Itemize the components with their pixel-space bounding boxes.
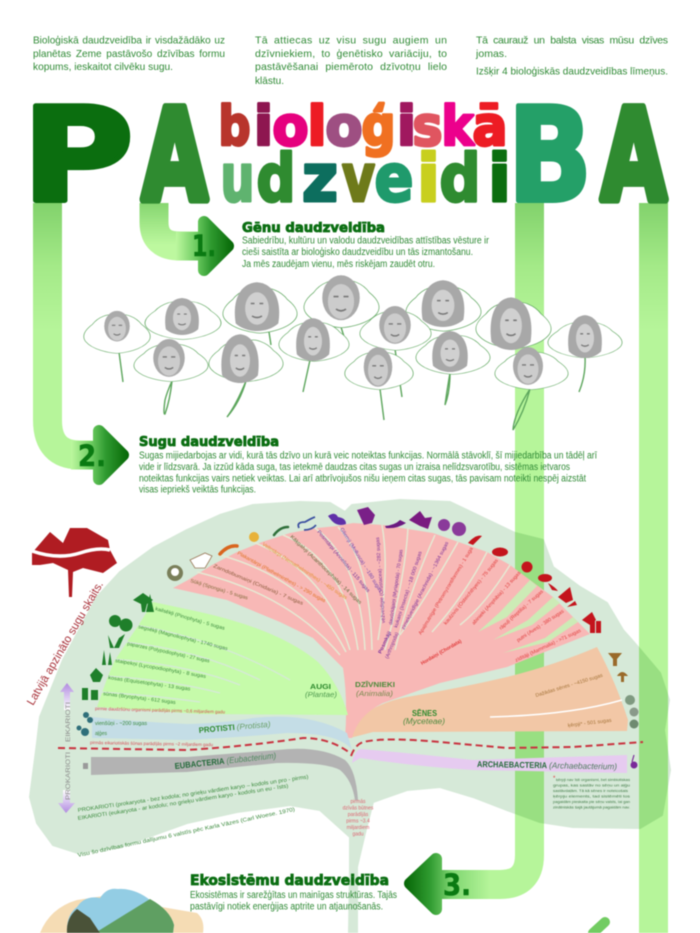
- plant labels: sūnas (Bryophyta) - 612 sugas: [103, 691, 176, 706]
- protist labels: aļģes: [95, 730, 108, 737]
- note: first life forms: dzīvās būtnes: [343, 806, 374, 812]
- arthropod labels: [375, 537, 451, 660]
- icon: Latvia map leaf: [32, 528, 117, 597]
- plant labels: kailsēkļi (Pinophyta) - 5 sugas: [154, 606, 226, 632]
- note: first eukaryotic cells: pirmās eikariotiskās šūnas parādījās pirms ~2 miljardiem gadu: [90, 740, 214, 747]
- title: bioloģiskā: [218, 95, 508, 158]
- text: ecosystem diversity: Ekosistēmas ir sarežģītas un mainīgas struktūras. Tajās: [190, 888, 397, 901]
- title: bioloģiskā: o: [272, 95, 308, 158]
- icons: fungi: [608, 653, 638, 728]
- title: udzveidi: i: [488, 140, 511, 217]
- title: udzveidi: [220, 140, 511, 217]
- label: PROTISTI: PROTISTI: [198, 723, 235, 735]
- note: lichens footnote: sastāvdaļām. Tā kā sēnes ir noteicošais: [553, 789, 628, 793]
- plant labels: segsēkļi (Magnoliophyta) - 1740 sugas: [138, 624, 229, 652]
- icons: vertebrates: [468, 536, 601, 633]
- ginkgo leaf with face 9: [209, 334, 283, 417]
- intro paragraph 2: klāstu.: [255, 75, 284, 87]
- label: AUGI (Plantae): (Plantae): [305, 690, 338, 699]
- fungi labels: Dažādas sēnes - ~4150 sugas: [535, 673, 604, 699]
- label: EUBACTERIA: [174, 750, 277, 771]
- text: genetic diversity: Ja mēs zaudējam vienu, mēs riskējam zaudēt otru.: [242, 259, 435, 270]
- invertebrate labels: Kāķgalvji (Acanthocephala) - 14 sugas: [289, 534, 363, 606]
- white line in fungi wedge: [490, 700, 622, 717]
- note: lichens footnote: grupas, kas sastāv no sēņu un aļģu: [553, 782, 630, 788]
- panel: fungi wedge: [350, 647, 628, 738]
- heading: Sugu daudzveidība: Sugu daudzveidība: [139, 435, 279, 450]
- arthropod labels: vēžveidīgie (Crustacea) - ~282 sugas: [375, 537, 387, 623]
- text: genetic diversity: cieši saistīta ar bioloģisko daudzveidību un tās izmantošanu.: [242, 245, 473, 258]
- note: first life forms: pirmās: [350, 799, 366, 805]
- invertebrate labels: Sūkļi (Spongia) - 5 sugas: [189, 578, 249, 602]
- title: udzveidi: v: [342, 140, 375, 217]
- intro paragraph 3: jomas.: [475, 48, 507, 60]
- arthropod labels: daudzkājaiņi (Myriapoda) - 70 sugas: [388, 549, 405, 625]
- intro paragraph 3: Izšķir 4 bioloģiskās daudzveidības līmeņus.: [476, 64, 668, 78]
- heading: Gēnu daudzveidība: Gēnu daudzveidība: [242, 221, 385, 236]
- intro paragraph 2: [255, 34, 447, 87]
- title: big letters PA: [22, 81, 207, 232]
- label: DZĪVNIEKI (Animalia): [355, 680, 395, 698]
- label: SĒNES (Myceteae): SĒNES: [412, 709, 438, 718]
- fungi labels: [535, 673, 612, 729]
- title: udzveidi: u: [220, 140, 254, 217]
- label: ARCHAEBACTERIA: [477, 759, 617, 771]
- chordate labels: Apaļmutnīgie (Petromyzontiformes) - 1 suga: [418, 546, 475, 636]
- note: first life forms: [343, 799, 374, 838]
- ginkgo leaf with face 7: [548, 315, 622, 392]
- arthropod labels: Posmkāji: [377, 630, 393, 655]
- ginkgo leaf with face 10: [279, 318, 349, 392]
- intro paragraph 1: [33, 34, 225, 73]
- title: udzveidi: z: [302, 140, 338, 217]
- text: species diversity: noteiktas funkcijas vairs netiek veiktas. Lai arī atbrīvojušos nišu ieņem citas sugas, tās pavisam noteikti nespēj aizstāt: [139, 474, 586, 484]
- plant labels: [103, 606, 229, 706]
- title: big letters BA: A: [601, 83, 666, 230]
- ginkgo leaf with face 4: [304, 275, 379, 340]
- text: ecosystem diversity: [190, 888, 397, 912]
- plant wedge dividers: [100, 625, 290, 702]
- title: udzveidi: d: [440, 140, 480, 217]
- chordate labels: zīdītāji (Mammalia) - >71 sugas: [514, 628, 583, 664]
- title: bioloģiskā: k: [442, 95, 474, 158]
- note: lichens footnote: zinātniskās šajā jautājumā pagaidām nav.: [553, 806, 630, 810]
- title: bioloģiskā: l: [308, 95, 326, 158]
- intro paragraph 1: kopums, ieskaitot cilvēku sugu.: [33, 61, 173, 73]
- note: lichens footnote: *: [553, 776, 556, 782]
- ginkgo leaf with face 13: [345, 347, 413, 420]
- arthropod labels: (Arthropoda): [384, 631, 400, 660]
- note: lichens footnote: [553, 776, 630, 810]
- band and arrow 1: 1.: [192, 229, 216, 263]
- text: species diversity: Sugas mijiedarbojas ar vidi, kurā tās dzīvo un kurā veic noteiktas funkcijas. Normālā stāvoklī, šī mijiedarbība un tādēļ arī: [139, 450, 597, 462]
- title: bioloģiskā: b: [218, 95, 250, 158]
- intro paragraph 1: planētas Zeme pastāvošo dzīvības formu: [33, 48, 225, 60]
- label: PROTISTI: (Protista): [236, 720, 271, 732]
- text: prokaryote and eukaryote definitions: PROKARIOTI (prokaryota - bez kodola; no grieķu vārdiem karyo – kodols un pro - pirms): [77, 774, 309, 814]
- title: udzveidi: i: [417, 140, 440, 217]
- invertebrate labels: Gliemji (Mollusca) - ~180 sugas: [338, 527, 383, 594]
- plant labels: paparzes (Polypodiophyta) - 27 sugas: [127, 641, 210, 665]
- title: big letters PA: P: [22, 81, 133, 232]
- text: genetic diversity: [242, 236, 490, 270]
- invertebrate labels: Posmtārpi (Annelida) - 115 sugas: [315, 529, 371, 594]
- icons: protists: [76, 712, 93, 736]
- animal wedge dividers: [197, 525, 578, 655]
- ginkgo leaf with face 2: [145, 298, 221, 340]
- title: bioloģiskā: i: [397, 95, 416, 158]
- label: DZĪVNIEKI (Animalia): (Animalia): [356, 689, 394, 698]
- label: PROTISTI: [198, 720, 271, 735]
- band and arrow 2: [48, 203, 123, 479]
- ginkgo leaf with face 6: [476, 297, 551, 350]
- intro paragraph 2: Tā attiecas uz visu sugu augiem un: [255, 34, 447, 46]
- label: SĒNES (Myceteae): (Myceteae): [403, 717, 445, 726]
- chordate labels: [418, 546, 583, 667]
- band: right green stem: [639, 203, 668, 933]
- title: bioloģiskā: s: [412, 95, 442, 158]
- label: AUGI (Plantae): AUGI: [310, 682, 331, 691]
- chordate labels: kaulzivis (Osteichthyes) - 75 sugas: [443, 558, 500, 626]
- band and arrow 3: [410, 203, 530, 909]
- ginkgo leaf with face 14: [495, 347, 568, 430]
- intro paragraph 3: [475, 34, 668, 78]
- fungi labels: ķērpji* - 501 sugas: [568, 718, 612, 729]
- note: first multicellular organisms: pirmie daudzšūnu organismi parādījās pirms ~0,6 miljardiem gadu: [95, 706, 226, 714]
- protist labels: vienšūņi - ~200 sugas: [95, 721, 148, 727]
- chordate labels: abinieki (Amphibia) - 13 sugas: [471, 570, 523, 626]
- panel: ginkgo fan background: [30, 500, 670, 933]
- panel: protists band: [92, 717, 352, 750]
- label: EUBACTERIA: (Eubacterium): [226, 750, 277, 766]
- text: species diversity: [139, 450, 597, 496]
- text: six kingdoms source: Visu šo dzīvības formu dalījumu 6 valstīs pēc Karla Vāzes (Carl Woese. 1970): [77, 807, 296, 859]
- invertebrate labels: Zarndobumaiņi (Cnidaria) - 7 sugas: [212, 563, 304, 607]
- note: lichens footnote: ķērpju elements, tad sistēmēti tos: [553, 794, 630, 798]
- title: bioloģiskā: ģ: [362, 95, 396, 158]
- ginkgo leaf with face 1: [84, 311, 150, 382]
- label: ARCHAEBACTERIA: ARCHAEBACTERIA: [477, 759, 547, 770]
- chordate labels: putni (Aves) - 380 sugas: [516, 608, 566, 644]
- invertebrate labels: [189, 527, 383, 607]
- label: ARCHAEBACTERIA: (Archaebacterium): [549, 760, 617, 771]
- ginkgo leaf with face 11: [360, 306, 431, 397]
- icons: bacteria: [83, 755, 638, 769]
- band and arrow 2: 2.: [78, 439, 106, 473]
- icons: plants: [82, 593, 154, 700]
- text: species diversity: vide ir līdzsvarā. Ja izzūd kāda suga, tas ietekmē daudzas citas sugas un izraisa nelīdzsvarotību, sistēmas ietvaros: [139, 462, 570, 473]
- invertebrate labels: Plakantārpi (Plathelminthes) - > 290 sugas: [236, 551, 327, 604]
- arthropod labels: zirnekļveidīgie (Arachnida) - ~1364 sugas: [400, 540, 451, 631]
- note: lichens footnote: ķērpji nav īsti organismi, bet simbiotiskas: [556, 778, 630, 782]
- ecosystem leaf: mountain scene: [67, 889, 174, 933]
- ecosystem leaf: beige base: [40, 895, 203, 933]
- plant labels: staipekņi (Lycopodiophyta) - 8 sugas: [115, 658, 207, 680]
- icons: invertebrates: [167, 507, 466, 581]
- invertebrate labels: Veltņtārpi (Nemathelminthes) - ~450 sugas: [261, 542, 348, 601]
- label: AUGI (Plantae): [305, 682, 338, 699]
- text: species diversity: visas iepriekš veiktās funkcijas.: [139, 484, 256, 496]
- label: SĒNES (Myceteae): [403, 709, 445, 726]
- text: prokaryote and eukaryote definitions: EIKARIOTI (eukaryota - ar kodolu; no grieķu vārdiem karyo - kodols un eu - īsts): [77, 783, 289, 822]
- panel: plants wedge: [97, 602, 348, 715]
- panel: eubacteria band: [91, 749, 358, 800]
- panel: archaebacteria band: [352, 749, 627, 773]
- intro paragraph 1: Bioloģiskā daudzveidība ir visdažādāko uz: [33, 34, 225, 46]
- title: big letters BA: B: [508, 81, 592, 232]
- dashed line: eukaryote / prokaryote boundary: [58, 738, 643, 756]
- note: first life forms: miljardiem: [347, 825, 369, 831]
- label: DZĪVNIEKI (Animalia): DZĪVNIEKI: [355, 680, 395, 689]
- label: EUBACTERIA: EUBACTERIA: [174, 756, 225, 771]
- title: big letters PA: A: [142, 83, 207, 230]
- note: first life forms: parādījās: [348, 812, 369, 818]
- ginkgo leaf with face 12: [416, 331, 490, 405]
- chordate labels: rāpuļi (Reptilia) - 7 sugas: [498, 589, 545, 631]
- ginkgo leaf with face 3: [223, 282, 297, 345]
- intro paragraph 2: dzīvniekiem, to ģenētisko variāciju, to: [255, 47, 447, 60]
- title: udzveidi: d: [256, 140, 296, 217]
- arrow 4 tip: [593, 922, 605, 933]
- arrow: eukaryotes up: [60, 683, 74, 742]
- caption: Latvijā apzināto sugu skaits: Latvijā apzināto sugu skaits.: [25, 579, 106, 708]
- title: udzveidi: e: [374, 140, 414, 217]
- intro paragraph 3: Tā caurauž un balsta visas mūsu dzīves: [476, 34, 668, 46]
- arrow: prokaryotes down: [58, 752, 75, 813]
- band and arrow 3: 3.: [443, 868, 471, 902]
- intro paragraph 2: pastāvēšanai piemēroto dzīvotņu lielo: [255, 61, 447, 73]
- title: bioloģiskā: ā: [472, 95, 508, 158]
- band and arrow 1: [154, 203, 228, 270]
- ginkgo leaf with face 5: [406, 280, 481, 331]
- arrow: eukaryotes up: EIKARIOTI: [65, 702, 72, 742]
- protist labels: [95, 721, 148, 737]
- heading: Ekosistēmu daudzveidība: Ekosistēmu daudzveidība: [190, 873, 389, 889]
- title: big letters BA: [508, 81, 666, 232]
- title: bioloģiskā: i: [254, 95, 273, 158]
- note: lichens footnote: pagaidām pieskaita pie sēņu valsts, lai gan: [553, 800, 630, 804]
- title: bioloģiskā: o: [326, 95, 362, 158]
- text: ecosystem diversity: pastāvīgi notiek enerģijas aptrite un atjaunošanās.: [190, 900, 383, 912]
- plant labels: kosas (Equisetophyta) - 13 sugas: [108, 675, 191, 693]
- note: first life forms: pirms ~3.4: [346, 818, 370, 824]
- panel: animals wedge: [173, 523, 590, 738]
- text: genetic diversity: Sabiedrību, kultūru un valodu daudzveidības attīstības vēsture ir: [242, 236, 490, 246]
- chordate labels: Hordaiņi (Chordata): [420, 638, 463, 667]
- arthropod labels: kukaiņi (Insecta) - ~18 000 sugas: [393, 550, 424, 629]
- ginkgo leaf with face 8: [134, 339, 208, 414]
- arrow: prokaryotes down: PROKARIOTI: [65, 752, 72, 800]
- note: first life forms: gadu: [352, 832, 364, 838]
